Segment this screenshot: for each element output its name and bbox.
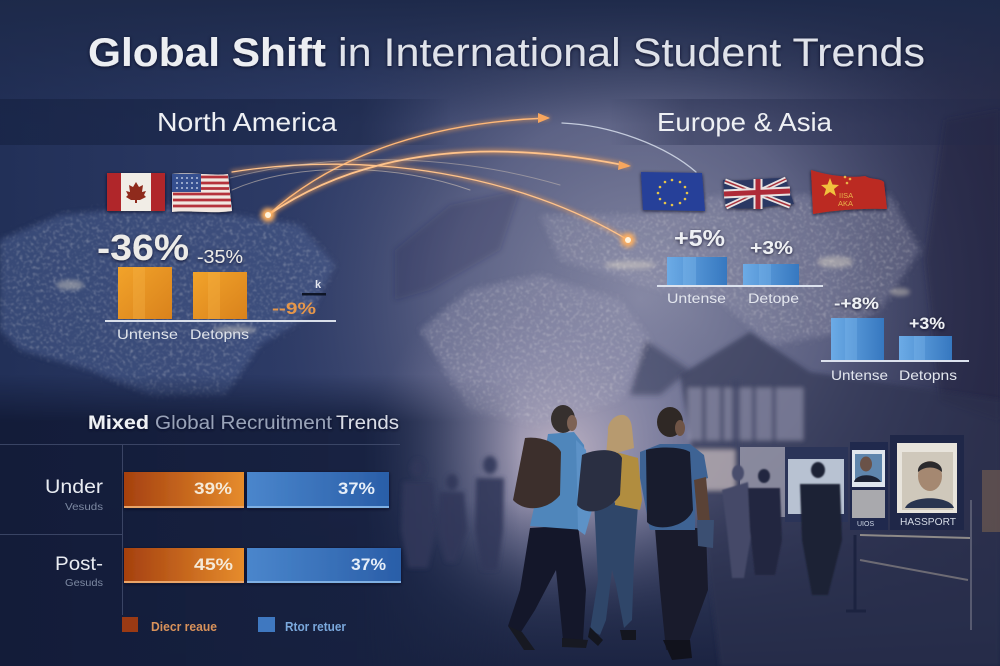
value: -35%: -35% xyxy=(197,247,243,267)
label: Detopns: Detopns xyxy=(899,367,957,383)
bar: Untense xyxy=(667,257,727,285)
row label: Under: Under xyxy=(45,477,104,498)
legend: Rtor retuer xyxy=(285,620,346,634)
student: left xyxy=(508,405,592,650)
heading bands xyxy=(0,99,1000,145)
label: Untense: Untense xyxy=(831,367,888,383)
bar: Detope xyxy=(743,264,799,285)
heading: Mixed xyxy=(88,413,149,434)
panel backdrop: recruitment xyxy=(0,375,520,666)
label: Detopns: Detopns xyxy=(190,326,249,342)
icon: China flag: IISA xyxy=(839,191,853,200)
heading xyxy=(88,413,399,434)
heading: North America: North America xyxy=(157,107,338,137)
bar: Post-: 37% xyxy=(351,555,386,574)
icon: Canada flag xyxy=(107,173,165,211)
legend xyxy=(122,617,346,634)
icon: China flag xyxy=(811,170,887,214)
silhouettes in queue xyxy=(722,462,842,595)
axis line xyxy=(657,285,823,287)
value: -+8%: -+8% xyxy=(834,294,879,313)
bar: Detopns xyxy=(193,272,247,319)
row label: Post- xyxy=(55,554,103,589)
icon: UK flag xyxy=(723,178,794,209)
student: right xyxy=(640,407,714,660)
bar: Untense xyxy=(118,267,172,319)
axis line xyxy=(105,320,336,322)
title: Global Shift xyxy=(88,31,326,75)
value: -36%: -36% xyxy=(97,227,189,268)
title: in International Student Trends xyxy=(338,31,925,75)
value: +3%: +3% xyxy=(750,238,793,258)
bar: Under: 37% xyxy=(338,479,375,498)
board: poster xyxy=(740,447,848,522)
panel: North America chart xyxy=(97,173,336,342)
bar: Post-: 45% xyxy=(194,555,233,574)
label: Untense: Untense xyxy=(667,291,726,306)
student: middle xyxy=(577,415,642,646)
building xyxy=(680,332,1000,666)
label: Untense: Untense xyxy=(117,326,178,342)
heading: Trends xyxy=(336,413,399,434)
background crowd xyxy=(401,456,504,570)
panel: Mixed Global Recruitment Trends xyxy=(0,413,401,634)
board: small photos xyxy=(850,442,888,530)
label: Detope: Detope xyxy=(748,291,799,306)
bar: Under: 39% xyxy=(194,479,232,498)
board: small photos: UIOS xyxy=(857,521,874,528)
bar: Detopns xyxy=(899,336,952,360)
row label: Post-: Gesuds xyxy=(65,577,103,589)
bar: Untense xyxy=(831,318,884,360)
board: passport photo: HASSPORT xyxy=(900,516,957,528)
small marker: k xyxy=(315,279,322,291)
row label: Post-: Post- xyxy=(55,554,103,575)
title xyxy=(88,31,925,75)
bar: Under xyxy=(124,472,389,508)
axis line xyxy=(821,360,969,362)
board: passport photo xyxy=(890,435,964,530)
far-right hall and boards xyxy=(680,332,1000,666)
value: +3%: +3% xyxy=(909,314,945,333)
students group xyxy=(508,405,714,660)
row label: Under xyxy=(45,477,104,513)
flight arcs xyxy=(230,113,696,247)
rope barrier xyxy=(846,500,971,630)
panel: Europe and Asia charts xyxy=(641,170,969,383)
world map xyxy=(0,110,1000,440)
icon: USA flag xyxy=(172,173,232,212)
heading: Europe & Asia: Europe & Asia xyxy=(657,107,833,137)
legend: Diecr reaue xyxy=(151,620,217,634)
bar: Post- xyxy=(124,548,401,583)
row label: Under: Vesuds xyxy=(65,501,103,513)
value: --9%: --9% xyxy=(272,299,316,318)
heading: Global Recruitment xyxy=(155,413,333,434)
icon: China flag: AKA xyxy=(838,199,853,208)
small marker xyxy=(302,279,326,296)
value: +5%: +5% xyxy=(674,225,725,251)
icon: EU flag xyxy=(641,172,705,211)
